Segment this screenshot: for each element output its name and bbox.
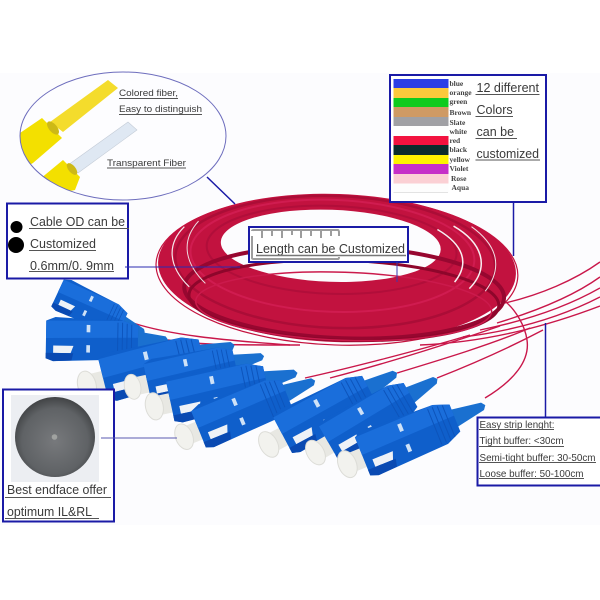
legend labels: Brown xyxy=(450,108,472,117)
legend labels: black xyxy=(450,145,468,154)
legend labels: white xyxy=(450,127,468,136)
panel: length xyxy=(249,227,408,262)
legend labels xyxy=(450,79,472,192)
legend labels: Violet xyxy=(450,164,469,173)
legend labels: red xyxy=(450,136,461,145)
text: colored fiber xyxy=(119,88,202,115)
text: endface xyxy=(5,483,111,519)
legend labels: orange xyxy=(450,88,472,97)
panel: strip length xyxy=(478,418,600,486)
legend labels: green xyxy=(450,97,468,106)
legend labels: blue xyxy=(450,79,464,88)
icon: 0.6mm dot xyxy=(10,221,22,233)
text: strip length: Tight buffer: <30cm xyxy=(480,435,564,447)
text: colored fiber: Colored fiber, xyxy=(119,88,178,99)
connector 4 xyxy=(120,336,269,408)
text: length: Length can be Customized xyxy=(256,241,405,256)
text: strip length: Easy strip lenght: xyxy=(480,419,554,431)
legend labels: Aqua xyxy=(452,183,469,192)
photo background xyxy=(0,73,600,525)
connector 8 xyxy=(296,360,449,475)
legend labels: yellow xyxy=(450,155,470,164)
text: 12 different colors xyxy=(476,81,540,161)
icon: fibre endface xyxy=(11,395,99,482)
trailing red fibres xyxy=(133,262,600,398)
text: transparent fiber: Transparent Fiber xyxy=(107,158,186,169)
connector 6 xyxy=(167,360,324,459)
text: strip length xyxy=(479,419,596,480)
leader: strip length to fibres xyxy=(544,323,546,417)
text: endface: Best endface offer xyxy=(7,483,107,497)
legend labels: Slate xyxy=(450,118,466,127)
callout: fiber bubble xyxy=(10,72,226,200)
leader: OD to coil xyxy=(125,266,240,268)
text: 12 different colors: can be xyxy=(476,125,514,139)
leader: bubble to coil xyxy=(207,177,235,204)
text: cable OD: Customized xyxy=(30,236,96,251)
connector 3 xyxy=(72,322,241,409)
connector 5 xyxy=(140,351,303,429)
connector 2 xyxy=(46,317,169,363)
text: 12 different colors: 12 different xyxy=(476,81,540,95)
connector 9 xyxy=(329,384,495,488)
panel: cable OD xyxy=(7,204,129,278)
text: endface: optimum IL&RL xyxy=(7,505,92,519)
leader: length to coil xyxy=(396,262,398,282)
legend swatches xyxy=(394,79,448,192)
text: cable OD: Cable OD can be xyxy=(30,214,125,229)
text: 12 different colors: Colors xyxy=(476,103,513,117)
text: colored fiber: Easy to distinguish xyxy=(119,104,202,115)
leader: colors to coil xyxy=(512,202,514,256)
icon: fibre illustration xyxy=(20,80,138,191)
fibre coil xyxy=(153,188,520,351)
text: cable OD xyxy=(29,214,129,273)
panel: endface xyxy=(3,390,114,522)
icon: 0.9mm dot xyxy=(8,237,24,253)
legend labels: Rose xyxy=(451,174,467,183)
icon: ruler xyxy=(252,230,339,259)
connector 7 xyxy=(249,353,409,468)
text: cable OD: 0.6mm/0. 9mm xyxy=(30,258,114,273)
text: 12 different colors: customized xyxy=(476,147,539,161)
connector 1 xyxy=(50,277,152,349)
text: strip length: Loose buffer: 50-100cm xyxy=(480,468,584,480)
text: strip length: Semi-tight buffer: 30-50cm xyxy=(480,452,596,464)
panel: colors xyxy=(390,75,546,202)
leader: endface to connector xyxy=(101,437,177,439)
